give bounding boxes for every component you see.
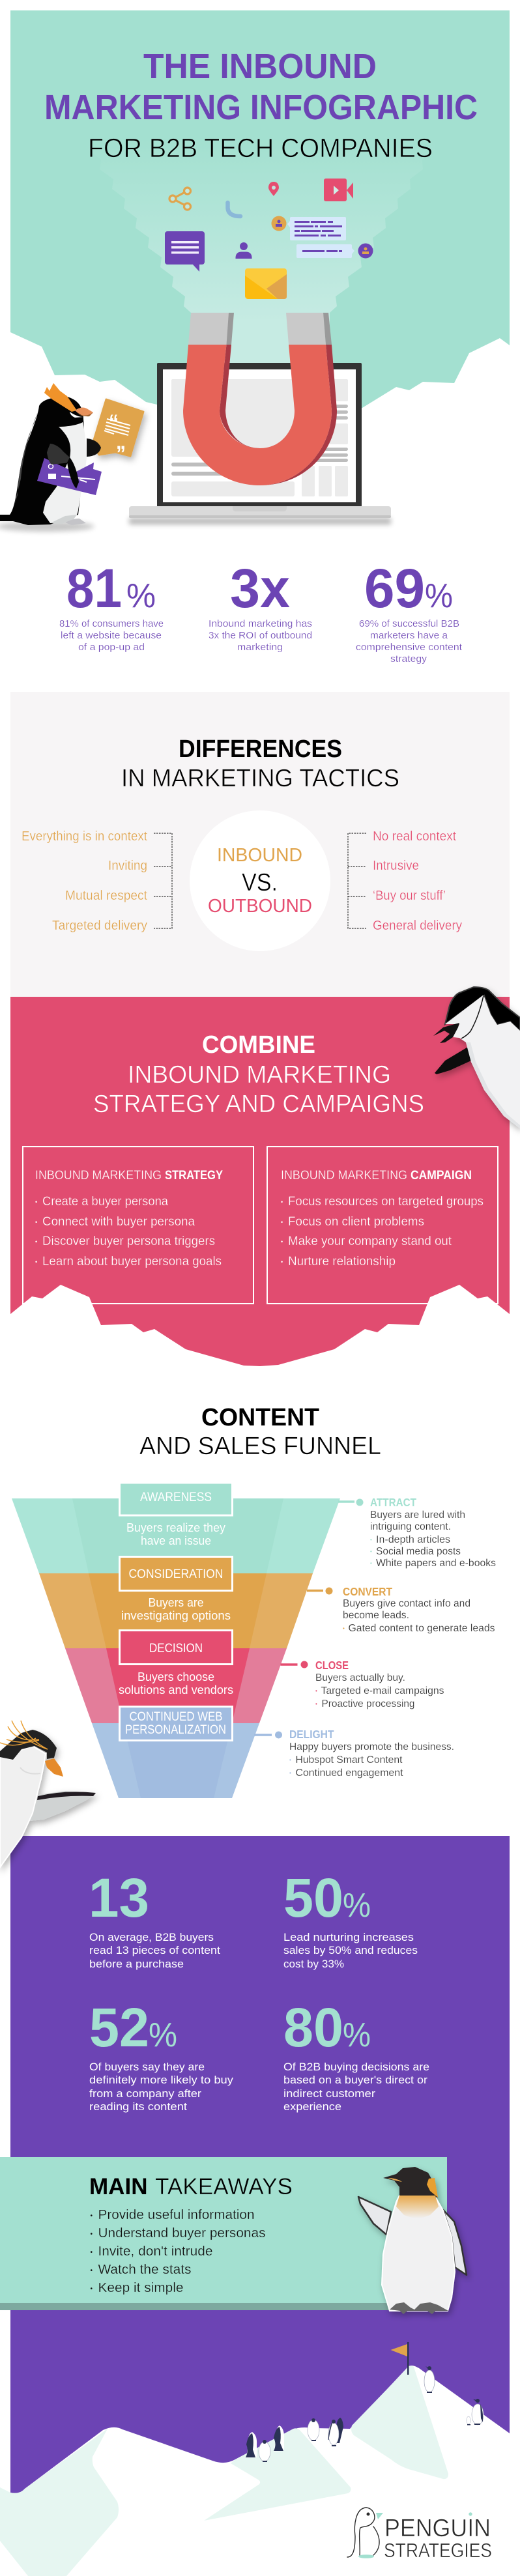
inbound traits: Inviting (108, 859, 147, 873)
outbound traits (373, 829, 462, 933)
callout: close: • (315, 1701, 317, 1707)
heading: STRATEGY AND CAMPAIGNS (93, 1091, 424, 1118)
stat: 52%: % (149, 2016, 177, 2054)
stat: 80%: 80 (283, 1997, 343, 2058)
takeaways list: Watch the stats (98, 2262, 192, 2277)
inbound traits: Targeted delivery (52, 919, 147, 933)
callout: close: Targeted e-mail campaigns (321, 1685, 444, 1696)
laptop (129, 363, 391, 524)
stat: 81% (59, 558, 164, 653)
stat: 81%: 81 (66, 558, 122, 619)
stat: 80%: % (343, 2016, 371, 2054)
heading (121, 736, 399, 792)
stat: 3x: Inbound marketing has (209, 618, 312, 629)
stat: 50%: Lead nurturing increases (283, 1931, 414, 1943)
stat: 69%: marketers have a (370, 630, 448, 641)
stat: 80%: based on a buyer's direct or (283, 2074, 427, 2086)
inbound bracket (154, 833, 172, 928)
flag (391, 2342, 409, 2375)
callout: attract: Buyers are lured with (370, 1510, 465, 1521)
callout: delight: • (289, 1770, 291, 1776)
stat: 81%: of a pop-up ad (78, 642, 145, 653)
penguin reading content (0, 383, 143, 532)
stat: 13 (89, 1867, 220, 1970)
heading: content and sales funnel: AND SALES FUNNEL (139, 1433, 381, 1460)
inbound traits (22, 829, 147, 933)
orange quote card: ” (116, 442, 126, 466)
stat: 81%: % (126, 577, 156, 615)
icon: person (235, 242, 252, 259)
icon: phone (228, 203, 240, 216)
callout: attract: White papers and e-books (376, 1558, 496, 1569)
takeaways list: • (90, 2231, 93, 2238)
box: strategy: • (35, 1259, 37, 1265)
penguin diving from top (433, 987, 520, 1128)
takeaways list: Invite, don't intrude (98, 2244, 212, 2259)
box: campaign: • (281, 1219, 283, 1225)
takeaways list: • (90, 2249, 93, 2256)
heading: IN MARKETING TACTICS (121, 765, 399, 792)
panel: differences (10, 692, 510, 998)
logo: Penguin Strategies: STRATEGIES (384, 2539, 492, 2562)
callout: delight: DELIGHT (289, 1728, 334, 1741)
stat: 80% (283, 1997, 429, 2113)
box: campaign: Focus resources on targeted groups (288, 1195, 484, 1209)
box: strategy: INBOUND MARKETING (35, 1169, 162, 1182)
light snow facet: right (351, 2366, 448, 2479)
light snow facet: middle (204, 2428, 351, 2521)
callout: convert: become leads. (343, 1610, 409, 1621)
panel: statistics (10, 1836, 510, 2494)
heading: COMBINE (202, 1031, 315, 1059)
stage: continued web personalization: CONTINUED WEB (129, 1710, 223, 1724)
box: campaign: • (281, 1238, 283, 1245)
panel: combine (0, 987, 520, 1381)
versus circle (190, 810, 330, 951)
takeaways list (90, 2207, 266, 2295)
heading (93, 1031, 424, 1118)
stage: consideration: investigating options (121, 1609, 231, 1622)
stage: awareness (120, 1483, 232, 1547)
heading: TAKEAWAYS (155, 2173, 293, 2199)
purple card (37, 458, 102, 495)
icon: map pin (268, 182, 279, 196)
heading: INBOUND MARKETING (128, 1061, 391, 1089)
icon: chat with orange avatar (271, 216, 346, 240)
callout: attract: • (370, 1537, 372, 1543)
callout: attract: Social media posts (376, 1546, 461, 1557)
stat: 69%: 69% of successful B2B (359, 618, 459, 629)
callout: close: • (315, 1688, 317, 1694)
stat: 13: 13 (89, 1867, 149, 1928)
penguin bowing over funnel (0, 1721, 96, 1867)
small penguins group (246, 2366, 484, 2462)
stat: 3x: marketing (237, 642, 283, 653)
outbound traits: Intrusive (373, 859, 419, 873)
stage: continued web personalization (120, 1707, 232, 1741)
stage: continued web personalization: PERSONALIZATION (125, 1723, 226, 1737)
panel: main takeaways (0, 2157, 447, 2310)
outbound traits: No real context (373, 829, 456, 844)
stat: 69%: comprehensive content (356, 642, 463, 653)
stat: 52%: 52 (89, 1997, 149, 2058)
stat: 50%: cost by 33% (283, 1958, 344, 1970)
stat: 52%: Of buyers say they are (89, 2061, 205, 2073)
stat: 80%: experience (283, 2100, 341, 2113)
subtitle: FOR B2B TECH COMPANIES (88, 133, 433, 163)
snow mountains with trail (0, 2366, 520, 2576)
stat: 52% (89, 1997, 234, 2113)
callout: close: Buyers actually buy. (315, 1672, 405, 1683)
box: campaign: Nurture relationship (288, 1255, 396, 1268)
stat: 80%: indirect customer (283, 2087, 375, 2100)
callout: delight: • (289, 1757, 291, 1763)
callout: delight: Continued engagement (296, 1767, 403, 1779)
callout: close (280, 1659, 444, 1710)
box: strategy (23, 1147, 253, 1304)
stat: 50%: % (343, 1887, 371, 1925)
stat: 50%: 50 (283, 1867, 343, 1928)
stat: 13: before a purchase (89, 1958, 184, 1970)
stat: 69%: strategy (390, 653, 427, 665)
stat: 69% (356, 558, 463, 665)
stat: 3x: 3x (230, 558, 290, 619)
callout: delight: Happy buyers promote the business. (289, 1741, 454, 1753)
icon: purple speech bubble (165, 231, 205, 272)
stage: decision: DECISION (149, 1641, 203, 1655)
stage: consideration: Buyers are (149, 1596, 203, 1609)
callout: attract (338, 1496, 496, 1569)
magnet (183, 313, 337, 485)
emperor penguin (358, 2167, 467, 2314)
stage: consideration: CONSIDERATION (129, 1567, 223, 1581)
funnel chart (12, 1483, 340, 1798)
callout: attract: In-depth articles (376, 1534, 450, 1545)
orange quote card (93, 399, 143, 466)
versus circle: OUTBOUND (208, 896, 312, 917)
stat: 80%: Of B2B buying decisions are (283, 2061, 429, 2073)
stat: 13: read 13 pieces of content (89, 1944, 220, 1956)
box: strategy: • (35, 1219, 37, 1225)
stat: 3x (209, 558, 312, 653)
inbound traits: Mutual respect (65, 889, 147, 903)
outbound traits: General delivery (373, 919, 462, 933)
box: campaign: • (281, 1259, 283, 1265)
stat: 50%: sales by 50% and reduces (283, 1944, 418, 1956)
versus circle: INBOUND (217, 845, 302, 866)
callout: attract: ATTRACT (370, 1496, 416, 1509)
box: campaign (267, 1147, 498, 1304)
stage: awareness: Buyers realize they (126, 1521, 225, 1534)
callout: convert: CONVERT (343, 1585, 392, 1598)
callout: convert: Buyers give contact info and (343, 1598, 470, 1609)
box: strategy: STRATEGY (165, 1169, 223, 1182)
stat: 13: On average, B2B buyers (89, 1931, 214, 1943)
stage: decision: Buyers choose (137, 1670, 214, 1683)
stage: decision (119, 1630, 233, 1696)
box: strategy: • (35, 1238, 37, 1245)
heading: content and sales funnel: CONTENT (201, 1404, 319, 1431)
icon: chat with purple avatar (296, 244, 373, 258)
takeaways list: Keep it simple (98, 2280, 184, 2295)
box: campaign: CAMPAIGN (411, 1169, 472, 1182)
title: THE INBOUND (143, 47, 377, 86)
callout: convert: Gated content to generate leads (348, 1623, 495, 1634)
snow mountains (0, 1285, 520, 1381)
stat: 52%: definitely more likely to buy (89, 2074, 234, 2086)
outbound bracket (348, 833, 366, 928)
box: strategy: Discover buyer persona triggers (42, 1235, 215, 1248)
box: campaign: • (281, 1199, 283, 1205)
stage: decision: solutions and vendors (119, 1683, 233, 1696)
takeaways list: Provide useful information (98, 2207, 254, 2222)
heading (89, 2173, 293, 2199)
stage: awareness: have an issue (141, 1534, 211, 1547)
title (44, 47, 478, 127)
takeaways list: Understand buyer personas (98, 2225, 266, 2240)
callout: attract: intriguing content. (370, 1521, 451, 1532)
box: strategy: Create a buyer persona (42, 1195, 168, 1209)
stat: 69%: 69 (364, 558, 425, 619)
callout: close: Proactive processing (322, 1698, 414, 1710)
snow mountains (0, 332, 520, 560)
heading: DIFFERENCES (179, 736, 342, 763)
logo: Penguin Strategies (347, 2508, 492, 2562)
callout: convert (307, 1585, 495, 1634)
box: strategy: Connect with buyer persona (42, 1215, 195, 1229)
box: campaign: Focus on client problems (288, 1215, 424, 1229)
title: MARKETING INFOGRAPHIC (44, 88, 478, 127)
heading: MAIN (89, 2173, 147, 2199)
icon: video camera (324, 179, 353, 201)
heading: content and sales funnel (139, 1404, 381, 1460)
callout: convert: • (343, 1625, 345, 1631)
stat: 52%: reading its content (89, 2100, 187, 2113)
icon: envelope (245, 268, 287, 299)
stage: consideration (120, 1557, 232, 1622)
stat: 69%: % (425, 577, 453, 615)
box: campaign: INBOUND MARKETING (281, 1169, 407, 1182)
stat: 3x: 3x the ROI of outbound (209, 630, 312, 641)
callout: delight: Hubspot Smart Content (296, 1754, 403, 1766)
callout: close: CLOSE (315, 1659, 349, 1672)
box: campaign: Make your company stand out (288, 1235, 452, 1248)
box: strategy: • (35, 1199, 37, 1205)
versus circle: VS. (242, 869, 278, 896)
stat: 81%: left a website because (61, 630, 162, 641)
icon: share (169, 188, 190, 210)
stat: 50% (283, 1867, 418, 1970)
logo: Penguin Strategies: PENGUIN (384, 2515, 491, 2542)
takeaways list: • (90, 2212, 93, 2220)
takeaways list: • (90, 2285, 93, 2293)
stage: awareness: AWARENESS (140, 1490, 212, 1504)
box: strategy: Learn about buyer persona goals (42, 1255, 222, 1268)
light snow facet: left (0, 2429, 119, 2576)
stat: 81%: 81% of consumers have (59, 618, 164, 629)
inbound traits: Everything is in context (22, 829, 147, 844)
callout: attract: • (370, 1549, 372, 1554)
panel: hero (0, 10, 520, 560)
orange quote card: “ (109, 410, 119, 435)
callout: delight (254, 1728, 454, 1779)
takeaways list: • (90, 2267, 93, 2274)
callout: attract: • (370, 1560, 372, 1566)
outbound traits: ‘Buy our stuff’ (373, 889, 446, 903)
stat: 52%: from a company after (89, 2087, 201, 2100)
